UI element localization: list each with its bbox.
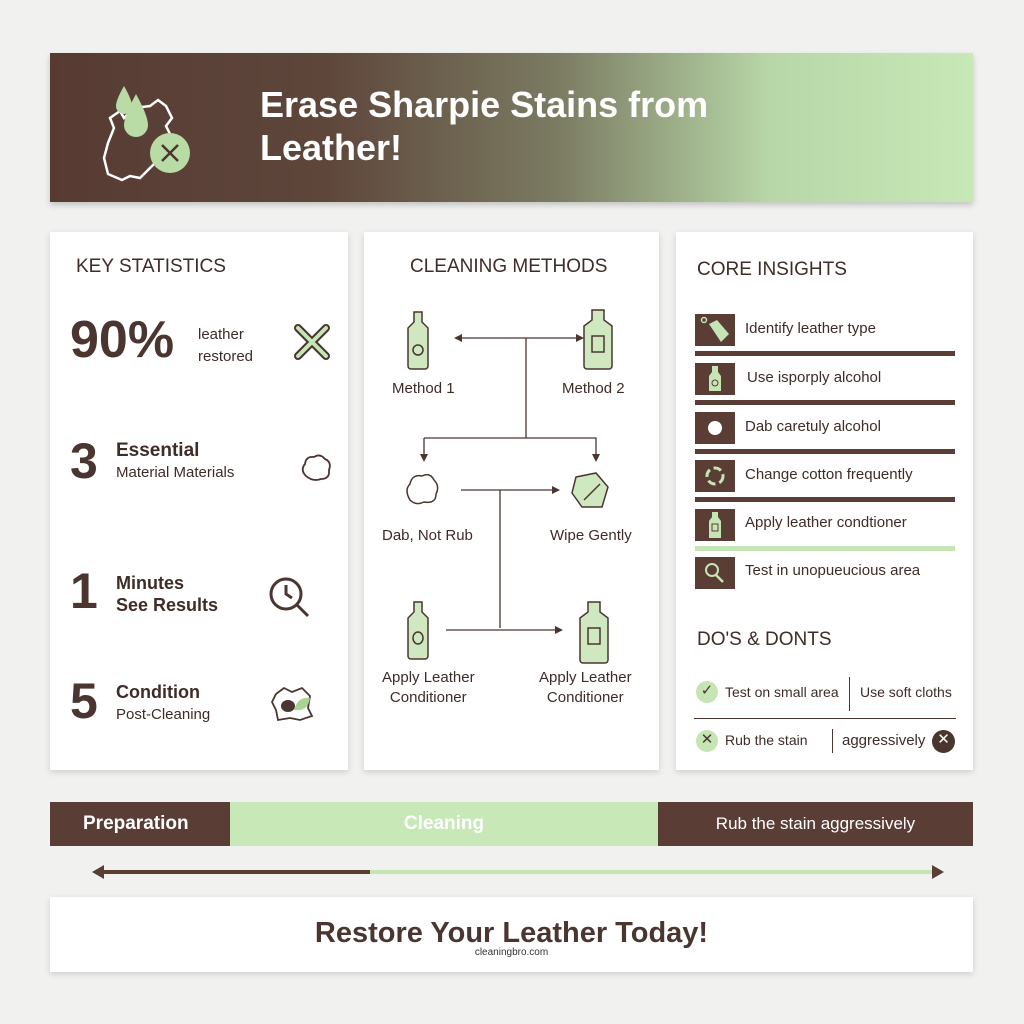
stat 5: 5 bbox=[70, 673, 98, 729]
footer call to action bbox=[50, 897, 973, 972]
dos and donts: Test on small area bbox=[725, 684, 839, 700]
title: Leather! bbox=[260, 127, 402, 168]
stat 3: 3 bbox=[70, 433, 98, 489]
stat 5: Condition bbox=[116, 682, 200, 702]
insight list bbox=[695, 314, 955, 589]
stat 1 bbox=[70, 563, 309, 619]
panel: cleaning methods: Apply Leather bbox=[539, 669, 632, 686]
dos and donts: ✕ bbox=[937, 731, 950, 748]
insight list: Use isporply alcohol bbox=[747, 369, 881, 386]
dos and donts: Rub the stain bbox=[725, 732, 808, 748]
panel: core insights bbox=[676, 232, 973, 770]
arrow bbox=[92, 865, 944, 879]
panel: key statistics bbox=[50, 232, 348, 770]
header banner bbox=[50, 53, 973, 202]
panel: key statistics: KEY STATISTICS bbox=[76, 256, 226, 277]
footer call to action: cleaningbro.com bbox=[475, 947, 548, 958]
panel: core insights: DO'S & DONTS bbox=[697, 629, 832, 650]
title: Erase Sharpie Stains from bbox=[260, 84, 708, 125]
timeline bar: Preparation bbox=[83, 813, 189, 834]
stat 5 bbox=[70, 673, 314, 729]
panel: cleaning methods: Method 1 bbox=[392, 380, 455, 397]
panel: cleaning methods: Apply Leather bbox=[382, 669, 475, 686]
panel: core insights: CORE INSIGHTS bbox=[697, 259, 847, 280]
panel: cleaning methods: Dab, Not Rub bbox=[382, 527, 473, 544]
dos and donts: ✓ bbox=[701, 682, 713, 699]
footer call to action: Restore Your Leather Today! bbox=[315, 917, 708, 949]
insight list: Change cotton frequently bbox=[745, 466, 913, 483]
stat 3 bbox=[70, 433, 331, 489]
dos and donts: Use soft cloths bbox=[860, 684, 952, 700]
insight list: Test in unopueucious area bbox=[745, 562, 920, 579]
panel: cleaning methods: Conditioner bbox=[390, 689, 467, 706]
panel: cleaning methods: Method 2 bbox=[562, 380, 625, 397]
timeline bar: Rub the stain aggressively bbox=[716, 814, 915, 833]
timeline bar: Cleaning bbox=[404, 813, 484, 834]
panel: cleaning methods: Wipe Gently bbox=[550, 527, 632, 544]
dos and donts: aggressively bbox=[842, 732, 925, 749]
stat 90%: leather bbox=[198, 326, 244, 343]
stat 1: Minutes bbox=[116, 573, 184, 593]
timeline bar bbox=[50, 802, 973, 846]
panel: cleaning methods bbox=[364, 232, 659, 770]
stat 3: Material Materials bbox=[116, 464, 234, 481]
panel: cleaning methods: CLEANING METHODS bbox=[410, 256, 607, 277]
stat 90% bbox=[70, 311, 330, 369]
insight list: Apply leather condtioner bbox=[745, 514, 907, 531]
insight list: Identify leather type bbox=[745, 320, 876, 337]
dos and donts: ✕ bbox=[701, 731, 713, 748]
stat 1: 1 bbox=[70, 563, 98, 619]
stat 1: See Results bbox=[116, 595, 218, 615]
insight list: Dab caretuly alcohol bbox=[745, 418, 881, 435]
stat 3: Essential bbox=[116, 440, 199, 461]
stat 5: Post-Cleaning bbox=[116, 706, 210, 723]
stat 90%: 90% bbox=[70, 311, 174, 369]
stat 90%: restored bbox=[198, 348, 253, 365]
title bbox=[260, 84, 708, 168]
panel: cleaning methods: Conditioner bbox=[547, 689, 624, 706]
dos and donts bbox=[694, 677, 956, 753]
flow diagram bbox=[406, 309, 613, 664]
icon: leather with drop bbox=[102, 86, 190, 182]
